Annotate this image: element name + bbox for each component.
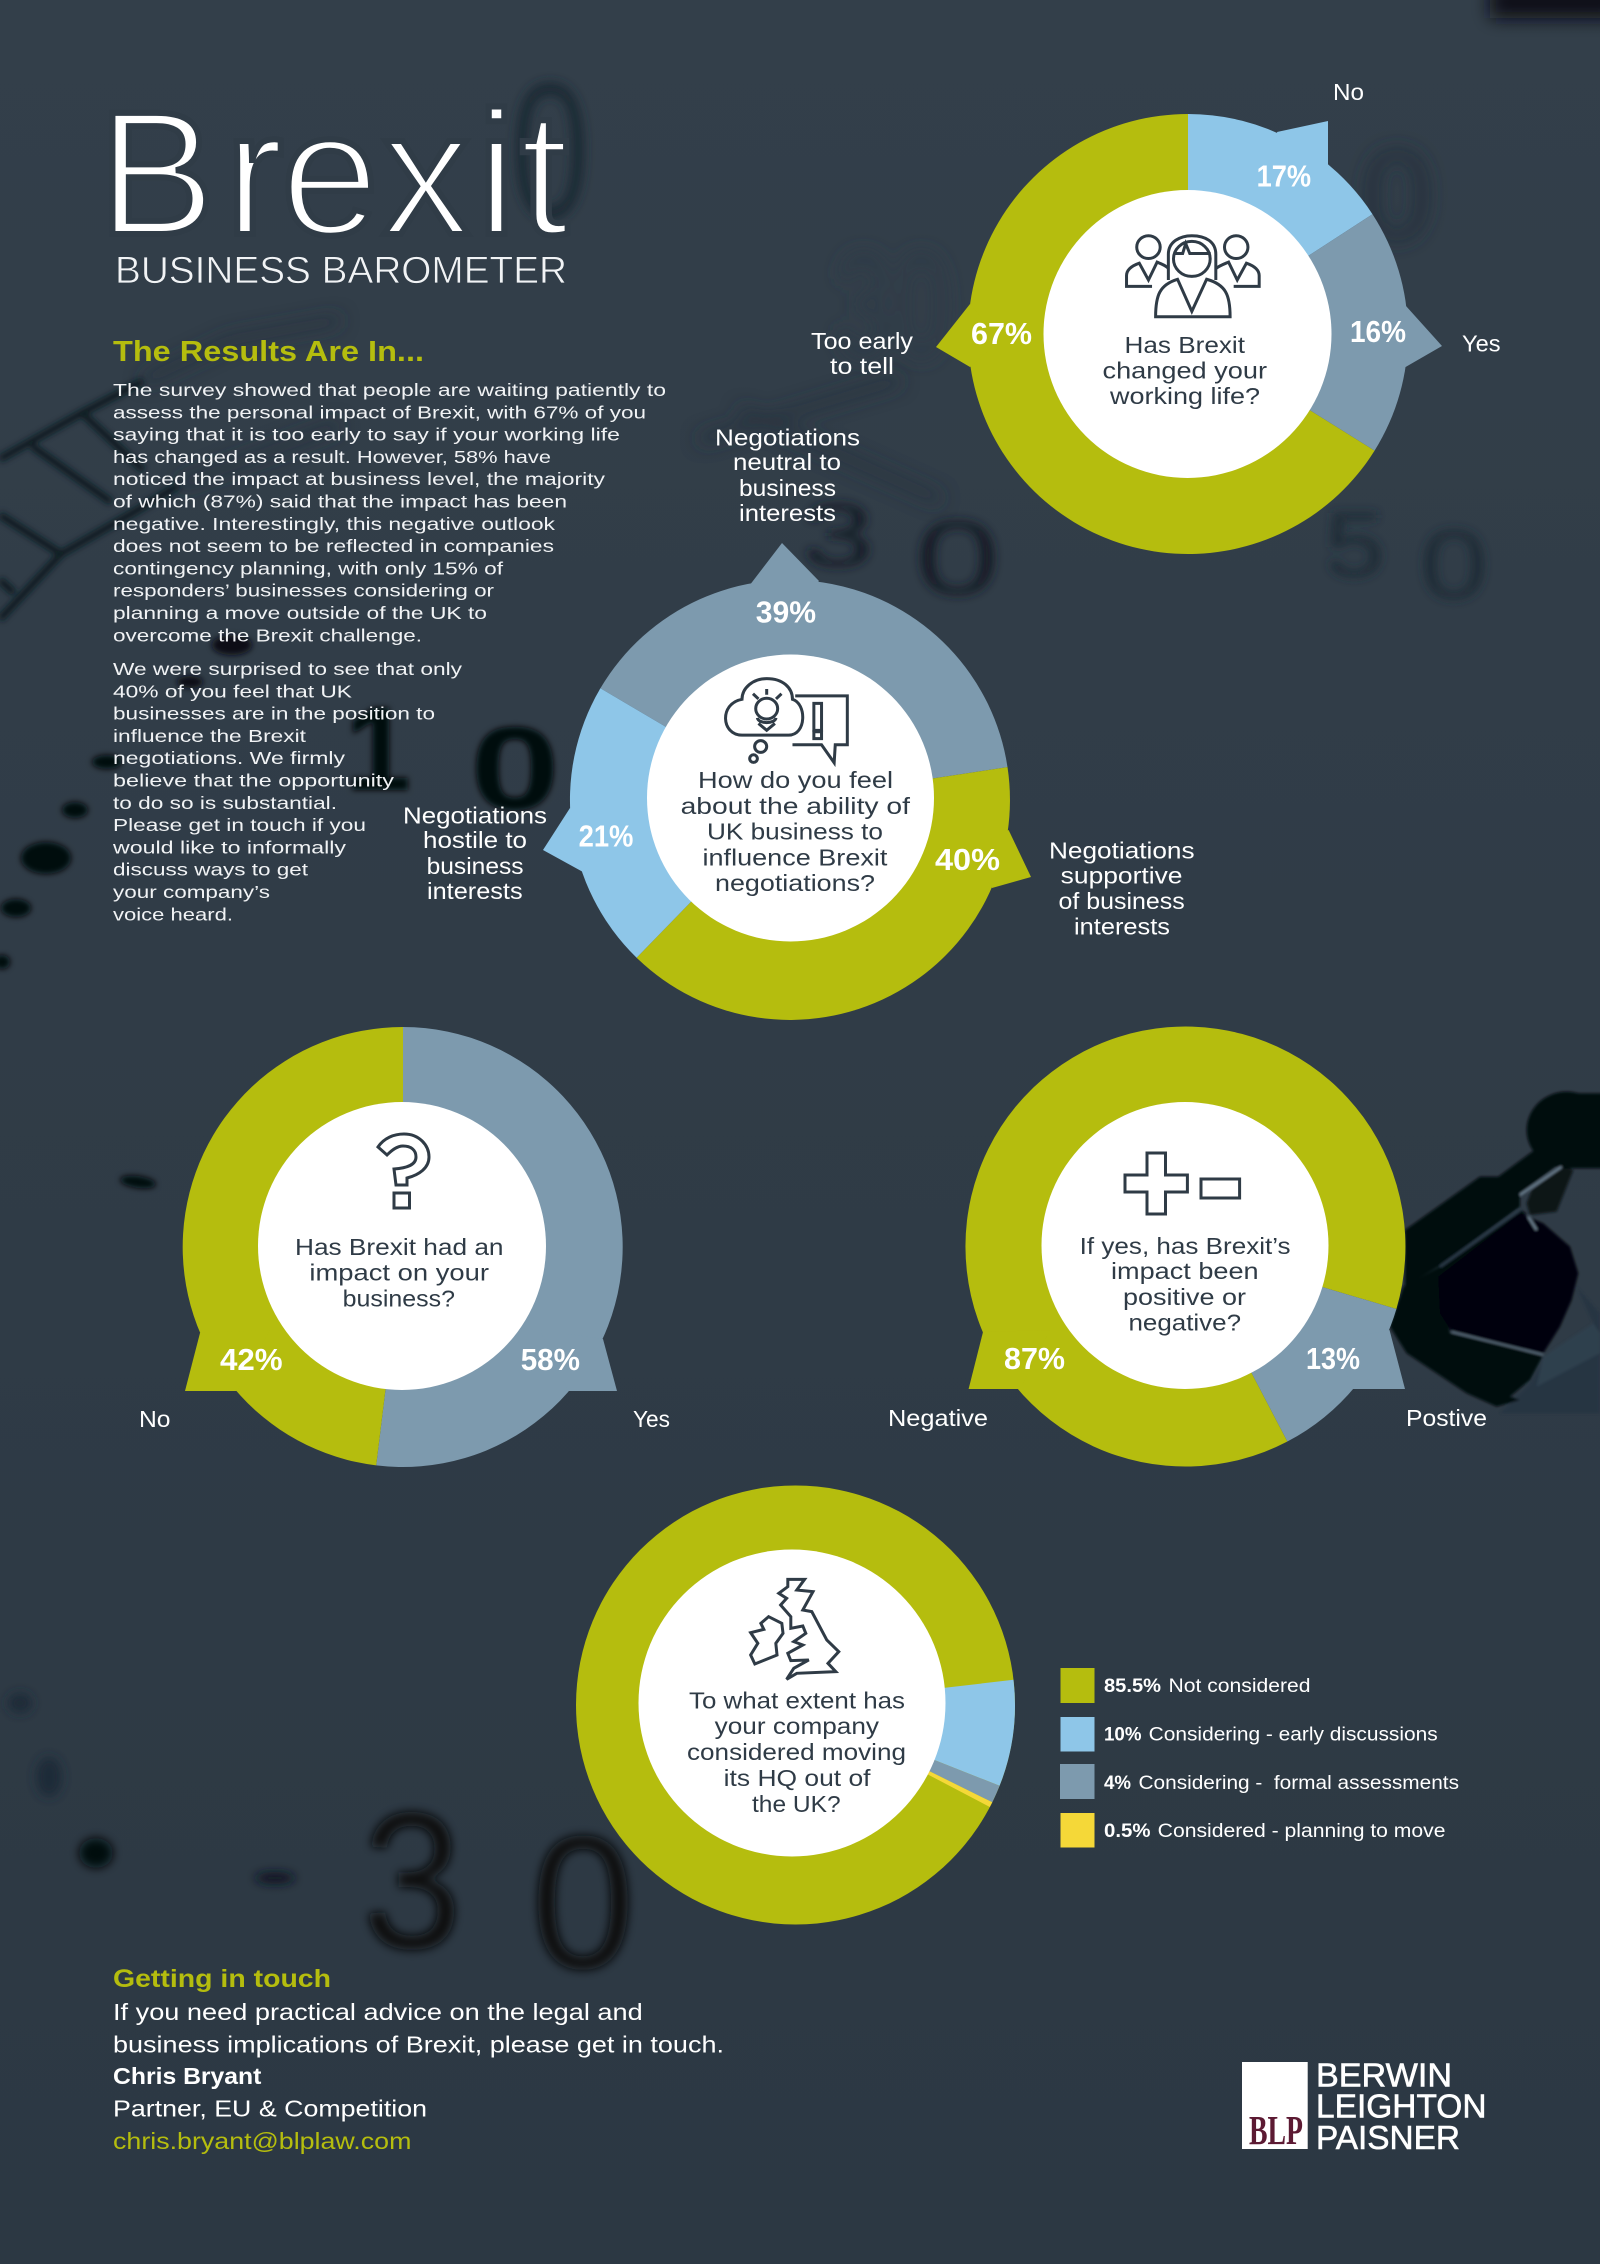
- legend item: 0.5% planning to move: [1060, 1813, 1446, 1848]
- question text: Has Brexit had an: [295, 1234, 504, 1260]
- label: yes: Yes: [1462, 330, 1500, 356]
- label: negotiations hostile: hostile to: [423, 827, 527, 853]
- logo: Berwin Leighton Paisner: PAISNER: [1316, 2119, 1460, 2156]
- chart: has Brexit had an impact on your business: [139, 1027, 670, 1467]
- icon: UK and Ireland map: [751, 1579, 839, 1679]
- background: blurred barometer dial photo: 0: [510, 42, 590, 260]
- centre circle: [258, 1102, 546, 1390]
- text block: survey results paragraph 1: saying that it is too early to say if your working life: [113, 425, 620, 445]
- segment: not considered 85.5%: [576, 1486, 1015, 1924]
- label: negative: Negative: [888, 1405, 988, 1431]
- legend item: 85.5% not considered: 85.5%: [1104, 1676, 1161, 1697]
- background: blurred barometer dial photo: 0: [1420, 510, 1488, 619]
- legend item: 4% formal assessments: [1060, 1764, 1459, 1799]
- question text: influence Brexit: [702, 844, 888, 870]
- text block: survey results paragraph 2: negotiations. We firmly: [113, 748, 345, 768]
- legend item: 85.5% not considered: Not considered: [1168, 1676, 1310, 1697]
- question text: changed your: [1102, 358, 1267, 384]
- legend item: 4% formal assessments: Considering - formal assessments: [1138, 1773, 1459, 1794]
- text block: survey results paragraph 1: The survey showed that people are waiting patiently to: [113, 380, 666, 400]
- label: negotiations hostile: interests: [427, 878, 523, 904]
- segment: no 17%: [1188, 114, 1372, 334]
- segment: formal assessments 4%: [796, 1705, 1000, 1802]
- question text: the UK?: [752, 1791, 841, 1817]
- legend item: 0.5% planning to move: 0.5%: [1104, 1821, 1151, 1842]
- value: 17%: 17%: [1257, 158, 1311, 193]
- question text: Has Brexit: [1124, 332, 1246, 358]
- text block: survey results paragraph 2: [112, 659, 462, 924]
- chart: moving HQ out of the UK: [576, 1486, 1015, 1924]
- question text: about the ability of: [681, 793, 911, 819]
- question text: working life?: [1109, 383, 1260, 409]
- question text: If yes, has Brexit’s: [1080, 1233, 1291, 1259]
- icon: question mark: [378, 1134, 429, 1208]
- legend item: 0.5% planning to move: Considered - planning to move: [1158, 1821, 1446, 1842]
- label: negotiations hostile: Negotiations: [403, 802, 547, 828]
- centre circle: [638, 1550, 946, 1856]
- label: negotiations supportive: of business: [1058, 888, 1185, 914]
- chart: has Brexit changed your working life: [811, 79, 1500, 554]
- background: blurred barometer dial photo: 0: [915, 500, 1000, 617]
- contact details: Chris Bryant: [113, 2063, 262, 2089]
- contact details: chris.bryant@blplaw.com: [113, 2128, 411, 2154]
- segment: supportive 40%: [637, 767, 1031, 1020]
- legend item: 4% formal assessments: 4%: [1104, 1773, 1131, 1794]
- value: 40%: 40%: [935, 842, 1000, 877]
- text block: survey results paragraph 1: of which (87%) said that the impact has been: [113, 492, 567, 512]
- value: 42%: 42%: [220, 1342, 283, 1377]
- value: 58%: 58%: [521, 1342, 580, 1377]
- text block: survey results paragraph 1: responders’ businesses considering or: [113, 581, 494, 601]
- centre circle: [647, 654, 934, 942]
- background: blurred barometer dial photo: 3: [802, 486, 874, 586]
- heading: the results are in: The Results Are In...: [113, 336, 424, 368]
- logo: Berwin Leighton Paisner: [1242, 2057, 1486, 2156]
- label: yes: Yes: [633, 1406, 670, 1432]
- contact details: [113, 1999, 724, 2154]
- text block: survey results paragraph 1: contingency planning, with only 15% of: [113, 558, 503, 578]
- question text: [681, 767, 911, 896]
- text block: survey results paragraph 2: to do so is substantial.: [113, 793, 337, 813]
- question text: considered moving: [687, 1739, 906, 1765]
- label: postive: Postive: [1406, 1405, 1487, 1431]
- background: blurred barometer dial photo: 0: [1361, 122, 1433, 268]
- text block: survey results paragraph 2: 40% of you feel that UK: [113, 681, 352, 701]
- text block: survey results paragraph 1: overcome the Brexit challenge.: [113, 625, 422, 645]
- title: Brexit: [98, 76, 569, 272]
- background: blurred barometer dial photo: 0: [531, 1797, 635, 2009]
- text block: survey results paragraph 2: would like to informally: [112, 837, 346, 857]
- text block: survey results paragraph 2: Please get in touch if you: [113, 815, 366, 835]
- chart: positive or negative impact: [888, 1027, 1487, 1467]
- text block: survey results paragraph 2: voice heard.: [113, 904, 233, 924]
- text block: survey results paragraph 1: [113, 380, 666, 645]
- question text: How do you feel: [698, 767, 893, 793]
- icon: idea cloud and speech bubble: [726, 679, 847, 763]
- icon: three business people: [1127, 236, 1259, 317]
- label: negotiations hostile: business: [427, 853, 524, 879]
- label: too early to tell: Too early: [811, 328, 914, 354]
- text block: survey results paragraph 2: discuss ways to get: [113, 860, 308, 880]
- contact details: business implications of Brexit, please get in touch.: [113, 2031, 724, 2057]
- question text: your company: [715, 1713, 880, 1739]
- text block: survey results paragraph 2: your company’s: [113, 882, 270, 902]
- icon: plus and minus: [1125, 1153, 1240, 1214]
- question text: [1102, 332, 1267, 409]
- text block: survey results paragraph 2: We were surprised to see that only: [113, 659, 462, 679]
- heading: getting in touch: Getting in touch: [113, 1965, 331, 1993]
- segment: hostile 21%: [543, 688, 790, 958]
- label: negotiations neutral: business: [739, 475, 836, 501]
- question text: positive or: [1123, 1284, 1246, 1310]
- text block: survey results paragraph 1: assess the personal impact of Brexit, with 67% of you: [113, 402, 646, 422]
- label: too early to tell: to tell: [830, 353, 894, 379]
- label: negotiations supportive: Negotiations: [1049, 838, 1195, 864]
- text block: survey results paragraph 1: negative. Interestingly, this negative outlook: [113, 514, 555, 534]
- background: blurred barometer dial photo: 30: [835, 221, 950, 389]
- value: 67%: 67%: [971, 316, 1032, 351]
- segment: yes 58%: [376, 1027, 623, 1467]
- label: negotiations supportive: supportive: [1061, 862, 1182, 888]
- value: 16%: 16%: [1350, 314, 1406, 349]
- legend item: 10% early discussions: Considering - early discussions: [1149, 1725, 1438, 1746]
- logo: Berwin Leighton Paisner: BLP: [1249, 2107, 1303, 2153]
- legend item: 10% early discussions: [1060, 1717, 1438, 1752]
- segment: early discussions 10%: [796, 1680, 1015, 1786]
- label: negotiations supportive: interests: [1074, 914, 1170, 940]
- background: blurred barometer dial photo: 0: [470, 703, 560, 835]
- segment: planning to move 0.5%: [796, 1705, 992, 1807]
- centre circle: [1042, 1102, 1328, 1389]
- question text: [687, 1688, 906, 1817]
- text block: survey results paragraph 1: noticed the impact at business level, the majority: [113, 469, 605, 489]
- label: too early to tell: [811, 328, 914, 379]
- label: negotiations neutral: neutral to: [733, 449, 841, 475]
- legend: [1060, 1668, 1459, 1848]
- background: blurred barometer dial photo: 3: [362, 1772, 462, 1990]
- value: 39%: 39%: [756, 594, 816, 629]
- question text: To what extent has: [689, 1688, 905, 1714]
- text block: survey results paragraph 1: has changed as a result. However, 58% have: [113, 447, 551, 467]
- question text: [295, 1234, 504, 1312]
- question text: negotiations?: [715, 870, 875, 896]
- text block: survey results paragraph 2: believe that the opportunity: [113, 770, 394, 790]
- label: negotiations neutral: [715, 424, 860, 526]
- text block: survey results paragraph 1: does not seem to be reflected in companies: [113, 536, 554, 556]
- label: negotiations hostile: [403, 802, 547, 904]
- segment: yes 16%: [1188, 214, 1442, 451]
- text block: survey results paragraph 2: businesses are in the position to: [113, 704, 435, 724]
- label: no: No: [1333, 79, 1364, 105]
- value: 21%: 21%: [579, 818, 633, 854]
- value: 87%: 87%: [1004, 1341, 1065, 1376]
- contact details: If you need practical advice on the legal and: [113, 1999, 643, 2025]
- text block: survey results paragraph 1: planning a move outside of the UK to: [113, 603, 487, 623]
- logo: Berwin Leighton Paisner: LEIGHTON: [1316, 2088, 1486, 2125]
- legend item: 85.5% not considered: [1060, 1668, 1310, 1703]
- subtitle: BUSINESS BAROMETER: [115, 250, 567, 292]
- question text: business?: [343, 1286, 455, 1312]
- background: blurred barometer dial photo: 1: [345, 682, 411, 816]
- logo: Berwin Leighton Paisner: BERWIN: [1316, 2057, 1452, 2094]
- text block: survey results paragraph 2: influence the Brexit: [113, 726, 306, 746]
- background: blurred barometer dial photo: 5: [1325, 494, 1385, 596]
- question text: UK business to: [707, 819, 883, 845]
- segment: negative 87%: [965, 1027, 1405, 1467]
- segment: too early to tell 67%: [936, 114, 1375, 554]
- segment: no 42%: [183, 1027, 403, 1465]
- segment: neutral 39%: [600, 543, 1008, 800]
- question text: impact on your: [309, 1260, 489, 1286]
- segment: positive 13%: [1186, 1246, 1405, 1442]
- label: negotiations neutral: interests: [739, 500, 836, 526]
- question text: negative?: [1128, 1310, 1241, 1336]
- question text: [1080, 1233, 1291, 1336]
- label: negotiations supportive: [1049, 838, 1195, 940]
- contact details: Partner, EU & Competition: [113, 2096, 427, 2122]
- label: negotiations neutral: Negotiations: [715, 424, 860, 450]
- centre circle: [1044, 190, 1332, 478]
- question text: impact been: [1111, 1258, 1259, 1284]
- legend item: 10% early discussions: 10%: [1104, 1725, 1142, 1746]
- chart: ability of UK business to influence negotiations: [403, 424, 1195, 1020]
- label: no: No: [139, 1406, 170, 1432]
- value: 13%: 13%: [1306, 1341, 1360, 1376]
- question text: its HQ out of: [724, 1765, 871, 1791]
